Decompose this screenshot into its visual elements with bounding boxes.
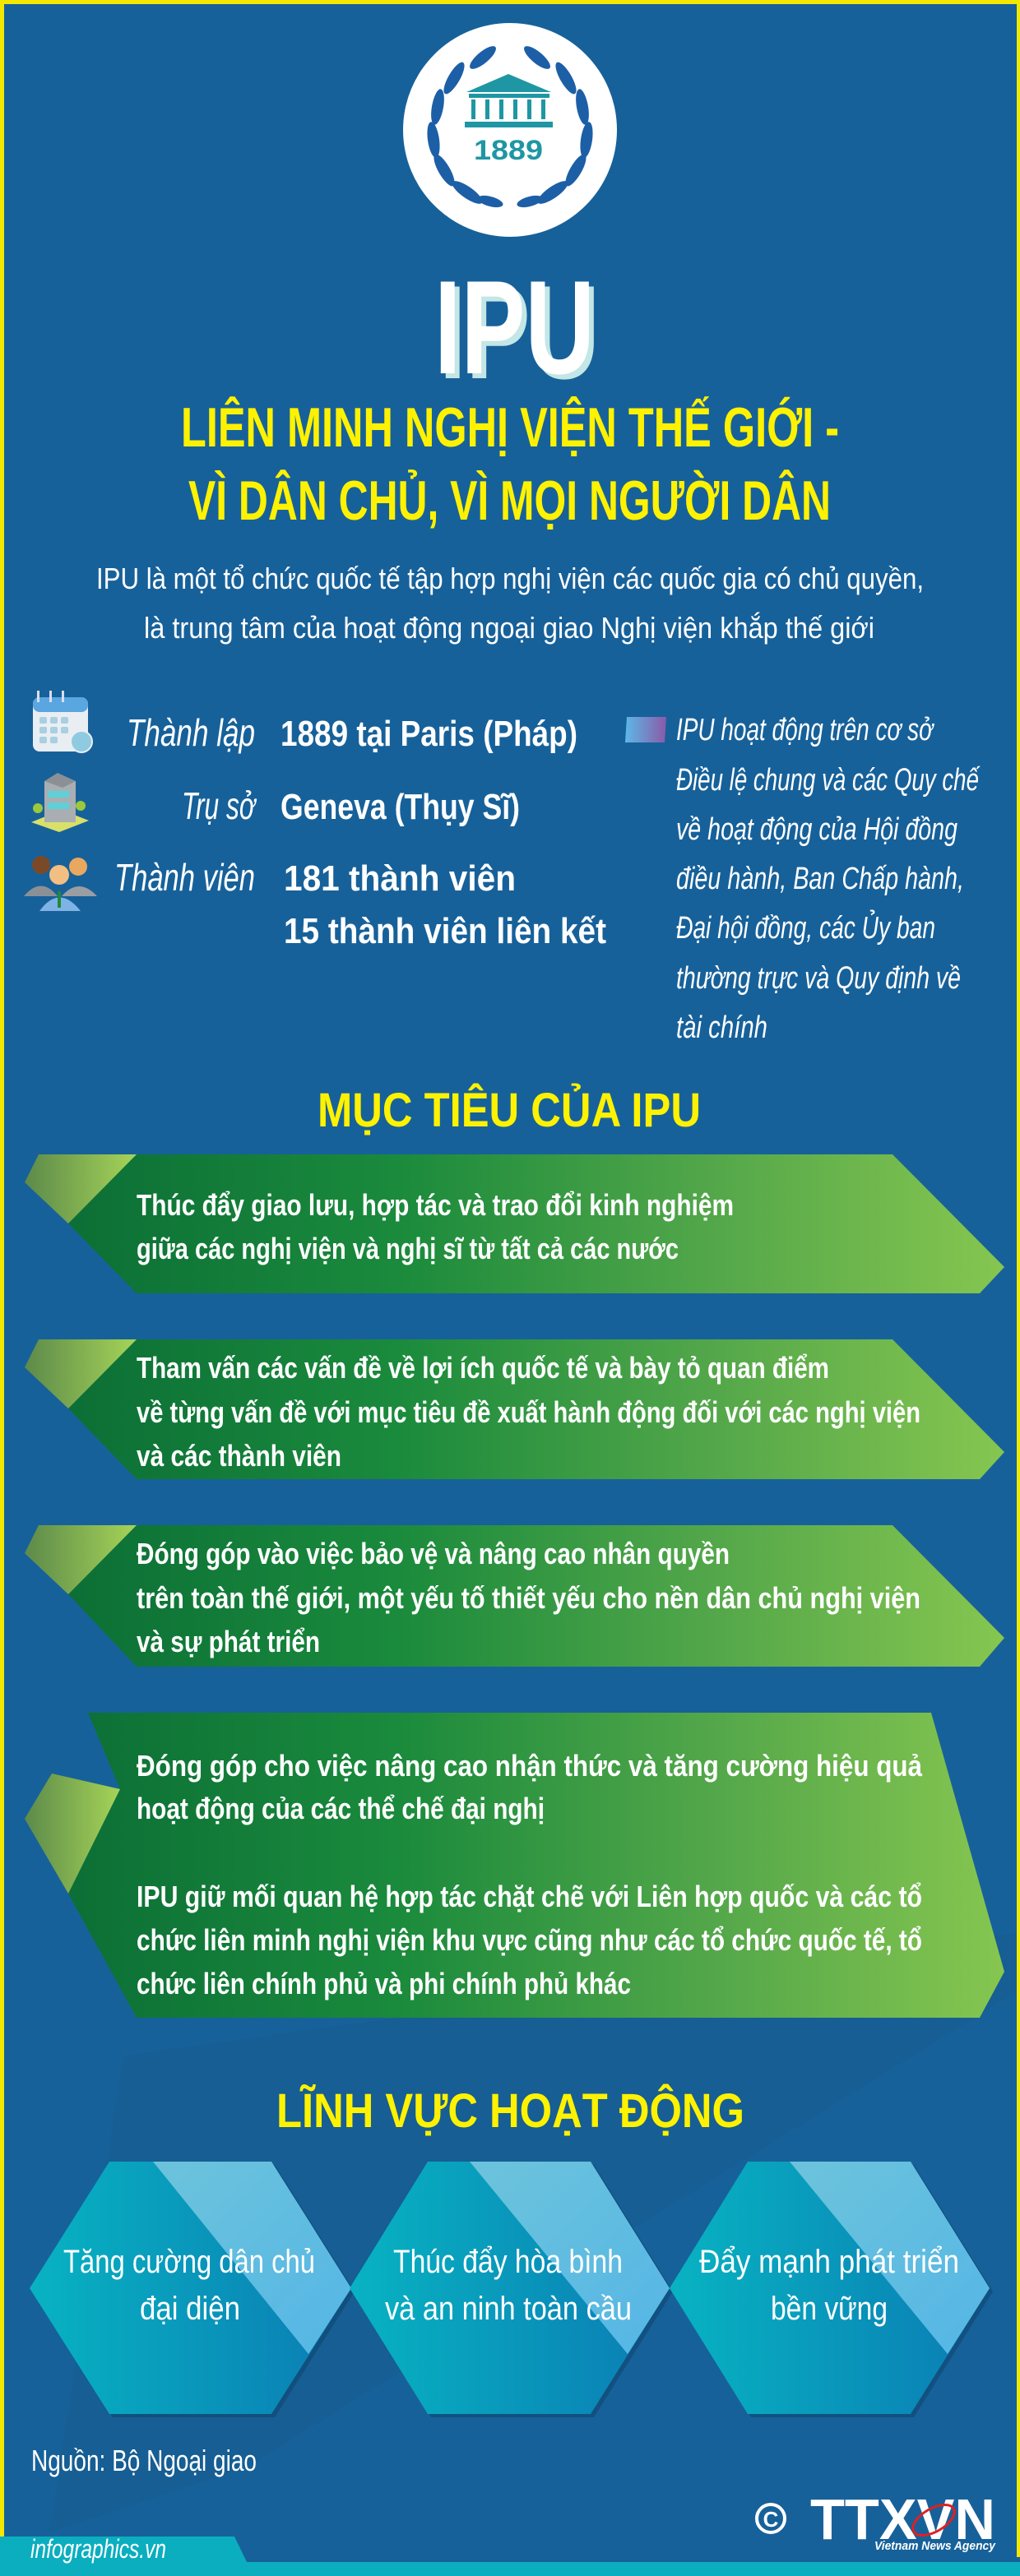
banner 4: Đóng góp cho việc nâng cao nhận thức và tăng cường hiệu quả — [137, 1749, 923, 1783]
intro paragraph — [96, 562, 924, 645]
banner 4: chức liên chính phủ và phi chính phủ khác — [137, 1967, 631, 2000]
hexagon 3: Đẩy mạnh phát triển — [699, 2244, 959, 2280]
title: IPU: IPU — [434, 253, 595, 402]
icon: people — [24, 856, 97, 911]
logo: IPU emblem: 1889 — [474, 135, 543, 166]
banner 3 — [25, 1525, 1004, 1667]
hexagon 1 — [30, 2162, 355, 2417]
hexagon 2: Thúc đẩy hòa bình — [393, 2244, 623, 2280]
info rows: Geneva (Thụy Sĩ) — [280, 787, 520, 827]
footer: TTXVN logo: C — [763, 2507, 779, 2532]
footer: infographics.vn bar: infographics.vn — [30, 2534, 166, 2564]
source note: Nguồn: Bộ Ngoại giao — [31, 2444, 257, 2477]
text block: regulations — [676, 713, 981, 1045]
title: subtitle — [181, 395, 839, 532]
hexagon 3: bền vững — [771, 2291, 888, 2327]
info rows: 1889 tại Paris (Pháp) — [280, 714, 577, 754]
heading: LĨNH VỰC HOẠT ĐỘNG: LĨNH VỰC HOẠT ĐỘNG — [276, 2084, 744, 2138]
footer: TTXVN logo: Vietnam News Agency — [874, 2539, 996, 2553]
banner 2: và các thành viên — [137, 1439, 341, 1473]
info rows: Thành lập — [127, 711, 255, 754]
hexagon 2 — [350, 2162, 673, 2417]
banner 4 — [25, 1713, 1004, 2018]
info rows: 181 thành viên — [284, 858, 516, 899]
hexagon 1: đại diện — [140, 2291, 240, 2327]
info rows: 15 thành viên liên kết — [284, 911, 606, 951]
icon: building — [31, 773, 89, 832]
heading: MỤC TIÊU CỦA IPU: MỤC TIÊU CỦA IPU — [318, 1084, 701, 1137]
hexagon 3 — [670, 2162, 993, 2417]
hexagon 1: Tăng cường dân chủ — [63, 2244, 315, 2280]
banner 2: Tham vấn các vấn đề về lợi ích quốc tế và bày tỏ quan điểm — [137, 1351, 829, 1385]
banner 4: hoạt động của các thể chế đại nghị — [137, 1792, 545, 1825]
icon: side bar marker — [625, 717, 666, 742]
footer: infographics.vn bar — [0, 2534, 1020, 2576]
info rows — [114, 711, 606, 951]
info rows: Trụ sở — [182, 784, 257, 827]
footer: TTXVN logo: TTXVN — [810, 2487, 995, 2551]
banner 2 — [25, 1339, 1004, 1479]
hexagon 2: và an ninh toàn cầu — [385, 2291, 632, 2327]
title: IPU: IPU — [439, 258, 600, 407]
intro paragraph: là trung tâm của hoạt động ngoại giao Nghị viện khắp thế giới — [144, 611, 874, 645]
text block: regulations: Đại hội đồng, các Ủy ban — [676, 909, 935, 946]
banner 3: và sự phát triển — [137, 1625, 320, 1658]
banner 1: Thúc đẩy giao lưu, hợp tác và trao đổi kinh nghiệm — [137, 1188, 734, 1222]
banner 1 — [25, 1154, 1004, 1293]
logo: IPU emblem — [403, 23, 617, 237]
text block: regulations: IPU hoạt động trên cơ sở — [676, 713, 934, 747]
banner 3: Đóng góp vào việc bảo vệ và nâng cao nhân quyền — [137, 1537, 730, 1570]
info rows: Thành viên — [114, 856, 255, 899]
banner 1: giữa các nghị viện và nghị sĩ từ tất cả các nước — [137, 1232, 679, 1265]
text block: regulations: tài chính — [676, 1011, 767, 1045]
icon: calendar — [33, 691, 92, 752]
